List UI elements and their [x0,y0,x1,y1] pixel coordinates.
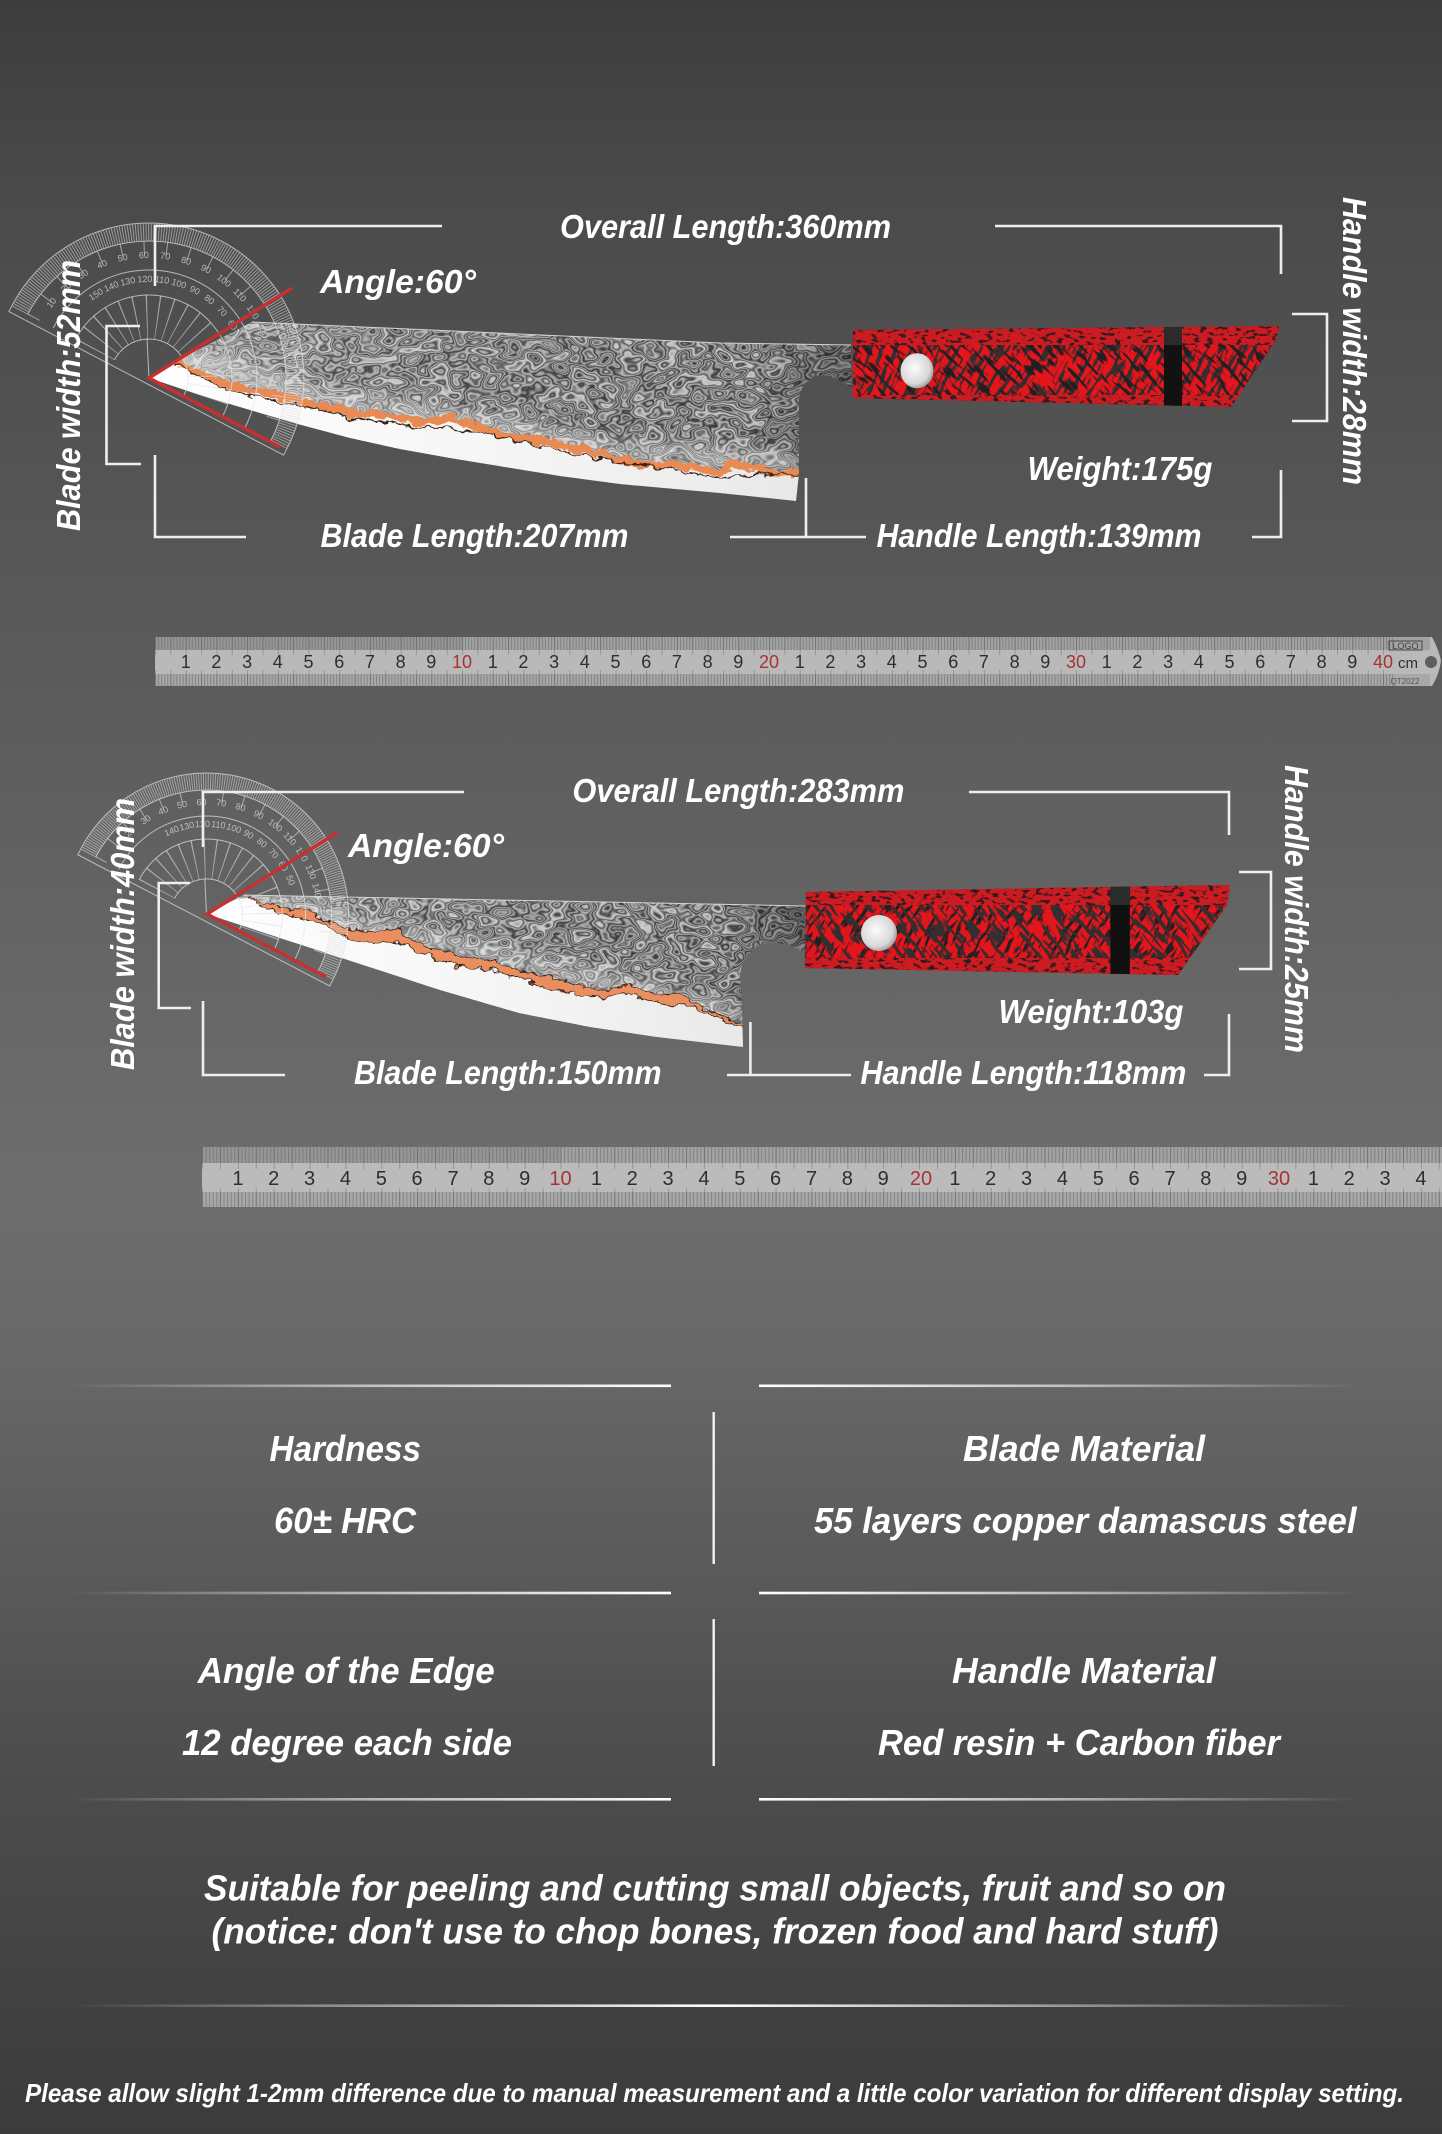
ruler 1: 1 [795,652,805,672]
ruler 1: 8 [1317,652,1327,672]
ruler 1: 1 [1102,652,1112,672]
ruler 1: 6 [1255,652,1265,672]
knife 2 protractor: 100 [266,817,284,834]
ruler 2: 5 [376,1168,387,1190]
ruler 1: cm [1398,655,1418,672]
spec: hardness [270,1428,421,1541]
ruler 1: 2 [825,652,835,672]
ruler 1: 1 [488,652,498,672]
knife 1 label: handle width: Handle width:28mm [1336,197,1373,485]
knife 1 protractor: 70 [215,304,229,318]
ruler 2: 4 [340,1168,351,1190]
knife 1 protractor [9,169,358,455]
knife 1 label: blade length: Blade Length:207mm [320,517,628,554]
knife 1 protractor: 10 [45,296,59,310]
ruler 1: QT2022 [1391,677,1420,686]
knife 2 protractor: 110 [211,819,226,831]
knife 1 spine highlight [252,322,851,345]
knife 2 label: blade width: Blade width:40mm [104,798,141,1070]
knife 2 protractor: 110 [281,830,298,847]
ruler 2: 1 [591,1168,602,1190]
ruler 2: 10 [549,1168,572,1190]
knife 2 protractor: 60 [196,797,207,807]
knife 1 protractor: 60 [226,318,239,332]
knife 2 label: weight: Weight:103g [998,993,1184,1030]
spec: blade material: Blade Material [963,1428,1206,1469]
spec: angle of the edge: 12 degree each side [182,1722,512,1763]
knife 2 label: handle width: Handle width:25mm [1278,765,1315,1053]
knife 2 label: blade length: Blade Length:150mm [354,1054,662,1091]
ruler 1: 5 [917,652,928,672]
knife 2 blade [210,895,805,1047]
ruler 1: 4 [1194,652,1204,672]
ruler 2: 8 [842,1168,853,1190]
ruler 1: 9 [426,652,436,672]
ruler 1: 30 [1066,652,1086,672]
ruler 2: 9 [1236,1168,1247,1190]
ruler 2: 6 [1129,1168,1140,1190]
spec: handle material [878,1650,1282,1763]
ruler 2: 2 [985,1168,996,1190]
knife 2 protractor: 70 [267,846,281,861]
knife 1: large kiritsuke [20,233,1439,653]
ruler 2: 7 [806,1168,817,1190]
knife 2 protractor: 80 [234,801,247,814]
spec: blade material: 55 layers copper damascus steel [814,1500,1357,1541]
knife 2 protractor: 90 [242,828,255,841]
knife 2 protractor: 90 [252,808,265,822]
ruler 2: 7 [447,1168,459,1190]
ruler 1: 10 [452,652,472,672]
spec: angle of the edge: Angle of the Edge [197,1650,495,1691]
ruler 1: 5 [1224,652,1235,672]
knife 2 protractor: 60 [276,859,290,873]
ruler 1: 6 [948,652,958,672]
knife 2 protractor: 80 [255,836,269,850]
ruler 2: 3 [304,1168,315,1190]
knife 1 label: overall length: Overall Length:360mm [560,208,891,245]
knife 2: small utility [210,885,1230,1047]
ruler 1: 4 [887,652,897,672]
ruler 2: 1 [949,1168,960,1190]
ruler 2: 7 [1164,1168,1176,1190]
ruler 1: 9 [1040,652,1050,672]
spec: blade material [814,1428,1357,1541]
knife 2 protractor: 50 [176,799,188,811]
ruler 1: 2 [1132,652,1142,672]
knife 1 protractor: 140 [102,279,120,294]
knife 2 protractor: 140 [310,882,323,899]
knife 1 label: weight: Weight:175g [1028,450,1212,487]
ruler 1: 9 [733,652,743,672]
knife 1 protractor: 110 [154,274,170,286]
ruler 2: 30 [1268,1168,1290,1190]
knife 1 protractor: 90 [199,262,213,276]
ruler 2: 8 [483,1168,494,1190]
knife 2 protractor: 140 [163,823,181,838]
ruler 2: 3 [1380,1168,1391,1190]
ruler 1: 6 [641,652,651,672]
ruler 1: 3 [242,652,252,672]
knife 2 protractor: 120 [195,819,210,829]
knife 1 protractor: 90 [188,284,202,297]
ruler 2: 3 [663,1168,674,1190]
ruler 1: 4 [580,652,590,672]
ruler 1: 9 [1347,652,1357,672]
ruler 2: 9 [878,1168,889,1190]
usage note [204,1868,1226,1952]
usage note: Suitable for peeling and cutting small objects, fruit and so on [204,1868,1226,1908]
knife 1 protractor: 130 [119,275,136,288]
knife 2 protractor: 40 [157,804,170,817]
knife 1 handle [853,326,1279,407]
spec: hardness: Hardness [270,1428,421,1469]
spec: handle material: Red resin + Carbon fiber [878,1722,1282,1763]
knife 2 protractor: 130 [178,820,195,833]
knife 1 blade [152,322,851,501]
ruler 2: 6 [412,1168,423,1190]
ruler 2: 3 [1021,1168,1032,1190]
ruler 2: 1 [1308,1168,1319,1190]
knife 2 protractor: 130 [303,863,318,881]
usage note: (notice: don't use to chop bones, frozen food and hard stuff) [212,1910,1218,1952]
ruler 2: 9 [519,1168,530,1190]
knife 1 protractor: 80 [180,254,192,267]
ruler 1: 20 [759,652,779,672]
ruler 2: 2 [1344,1168,1355,1190]
ruler 1: 8 [396,652,406,672]
ruler 1 [155,637,1441,686]
knife 1 protractor: 110 [231,286,248,304]
knife 1 label: handle length: Handle Length:139mm [876,517,1202,554]
ruler 1: 1 [181,652,191,672]
ruler 1: 40 [1373,652,1393,672]
knife 2 protractor: 100 [225,821,243,835]
knife 1 protractor: 120 [137,274,153,284]
knife 2 protractor: 120 [294,845,310,863]
ruler 1: 7 [979,652,989,672]
ruler 1: 5 [610,652,621,672]
knife 2 protractor: 70 [216,797,227,809]
ruler 1: 8 [1010,652,1020,672]
knife 1 protractor: 60 [139,250,149,260]
knife 1 protractor: 40 [96,258,109,271]
ruler 2: 2 [627,1168,638,1190]
ruler 2: 5 [1093,1168,1104,1190]
knife 1 protractor: 150 [87,286,105,303]
ruler 1: 6 [334,652,344,672]
knife 1 protractor: 130 [255,322,270,340]
ruler 2: 8 [1200,1168,1211,1190]
knife 2 label: handle length: Handle Length:118mm [860,1054,1186,1091]
ruler 1: 3 [549,652,559,672]
ruler 2: 4 [1415,1168,1426,1190]
knife 1 protractor: 100 [170,277,188,291]
ruler 2: 4 [1057,1168,1068,1190]
knife 1 label: angle: Angle:60° [319,263,477,300]
ruler 2: 4 [698,1168,709,1190]
knife 2 protractor [78,723,398,986]
knife 1 label: blade width: Blade width:52mm [50,260,87,531]
knife 2 dimension brackets [159,792,1271,1075]
knife 2 spine highlight [244,895,805,906]
ruler 1: LOGO [1392,641,1419,651]
ruler 1: 7 [672,652,682,672]
ruler 1: 2 [211,652,221,672]
ruler 1: 5 [303,652,314,672]
knife 2 protractor: 20 [123,825,137,839]
knife 1 protractor: 50 [117,252,129,264]
spec table rules [69,1384,1361,2007]
knife 1 dimension brackets [106,226,1327,537]
knife 2 protractor: 30 [139,813,153,827]
ruler 2: 20 [910,1168,932,1190]
ruler 2: 1 [232,1168,243,1190]
knife 1 protractor: 80 [202,293,216,307]
ruler 2: 5 [734,1168,745,1190]
knife 2 handle [805,885,1230,975]
ruler 1: 7 [365,652,375,672]
ruler 1: 2 [518,652,528,672]
spec: angle of the edge [182,1650,512,1763]
ruler 1: 4 [273,652,283,672]
ruler 1: 3 [1163,652,1173,672]
knife 2 label: angle: Angle:60° [347,827,505,864]
ruler 1: 3 [856,652,866,672]
spec: hardness: 60± HRC [274,1500,417,1541]
knife 1 protractor: 100 [215,272,233,289]
knife 1 protractor: 30 [76,267,90,281]
ruler 2: 6 [770,1168,781,1190]
ruler 2: 2 [268,1168,279,1190]
knife 1 protractor: 120 [245,303,261,321]
knife 1 protractor: 20 [59,280,73,294]
ruler 2 [202,1147,1442,1207]
ruler 1: 7 [1286,652,1296,672]
knife 1 angle lines [149,288,292,447]
knife 1 protractor: 70 [160,250,171,262]
knife 2 angle lines [207,832,338,977]
ruler 1: 8 [703,652,713,672]
knife 2 label: overall length: Overall Length:283mm [572,772,904,809]
spec: handle material: Handle Material [952,1650,1217,1691]
knife 2 protractor: 50 [284,874,297,887]
